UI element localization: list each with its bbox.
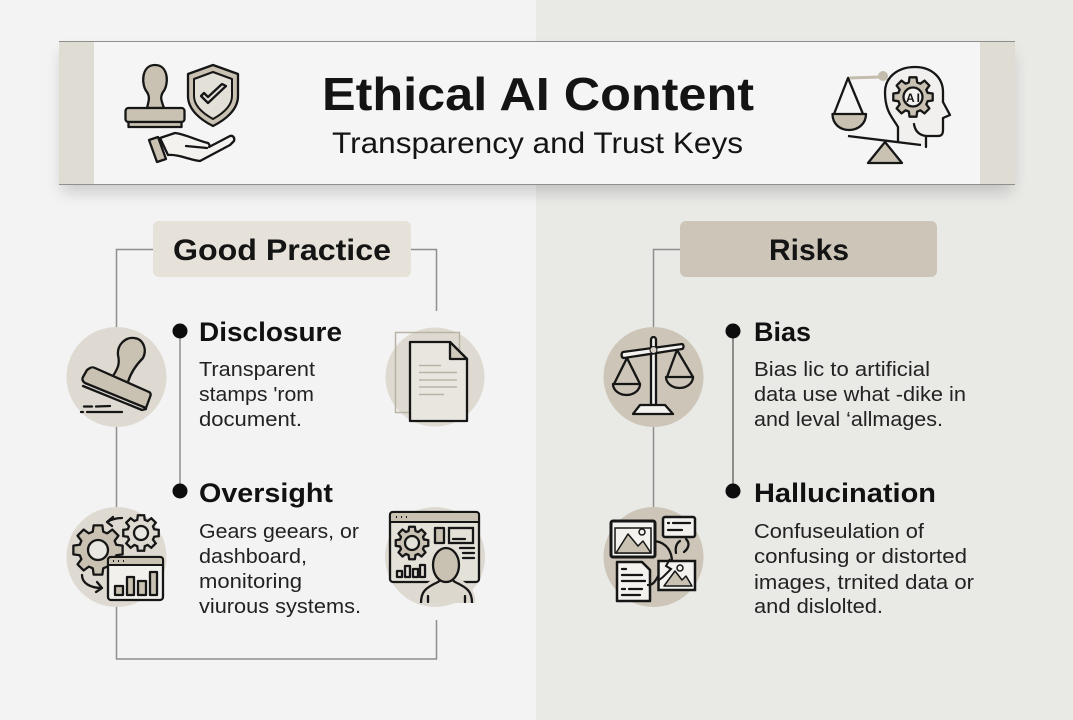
text: oversight: monitoring [199,570,302,593]
subtitle: Transparency and Trust Keys [332,127,743,160]
icon: scales and AI head [832,67,950,163]
text: disclosure: Disclosure [199,317,342,347]
icon: document in circle [386,328,484,426]
icon: stamp in circle [66,327,166,427]
timeline: good practice [172,324,188,498]
text: hallucination: and dislolted. [754,595,883,618]
heading: good practice: Good Practice [173,234,391,267]
panel: risks connector frame [654,250,680,510]
text: disclosure: Transparent [199,358,315,381]
icon: justice scale in circle [604,327,704,427]
text: bias [754,317,966,431]
text: disclosure: stamps 'rom [199,383,314,406]
text: oversight [199,478,361,618]
text: disclosure: document. [199,408,302,431]
text: hallucination [754,478,974,618]
icon: distorted images in circle [604,507,704,607]
text: hallucination: Confuseulation of [754,520,924,543]
text: oversight: viurous systems. [199,595,361,618]
icon: gears and dashboard in circle [66,507,166,607]
icon: stamp, shield and hand [126,65,238,162]
text: bias: Bias [754,317,811,347]
text: bias: data use what -dike in [754,383,966,406]
text: hallucination: Hallucination [754,478,936,508]
icon: monitor and person in circle [385,507,485,607]
title: Ethical AI Content [322,68,754,120]
heading: risks: Risks [769,234,849,267]
text: hallucination: confusing or distorted [754,545,967,568]
icon: scales and AI head: AI [906,91,920,105]
text: bias: Bias lic to artificial [754,358,930,381]
heading: risks [680,221,937,277]
text: oversight: Gears geears, or [199,520,359,543]
text: oversight: dashboard, [199,545,307,568]
panel: good practice connector frame [116,250,436,659]
title banner [59,41,1015,192]
text: hallucination: images, trnited data or [754,571,974,594]
text: bias: and leval ‘allmages. [754,408,943,431]
timeline: risks [726,324,740,498]
text: disclosure [199,317,342,431]
text: oversight: Oversight [199,478,333,508]
heading: good practice [153,221,411,277]
